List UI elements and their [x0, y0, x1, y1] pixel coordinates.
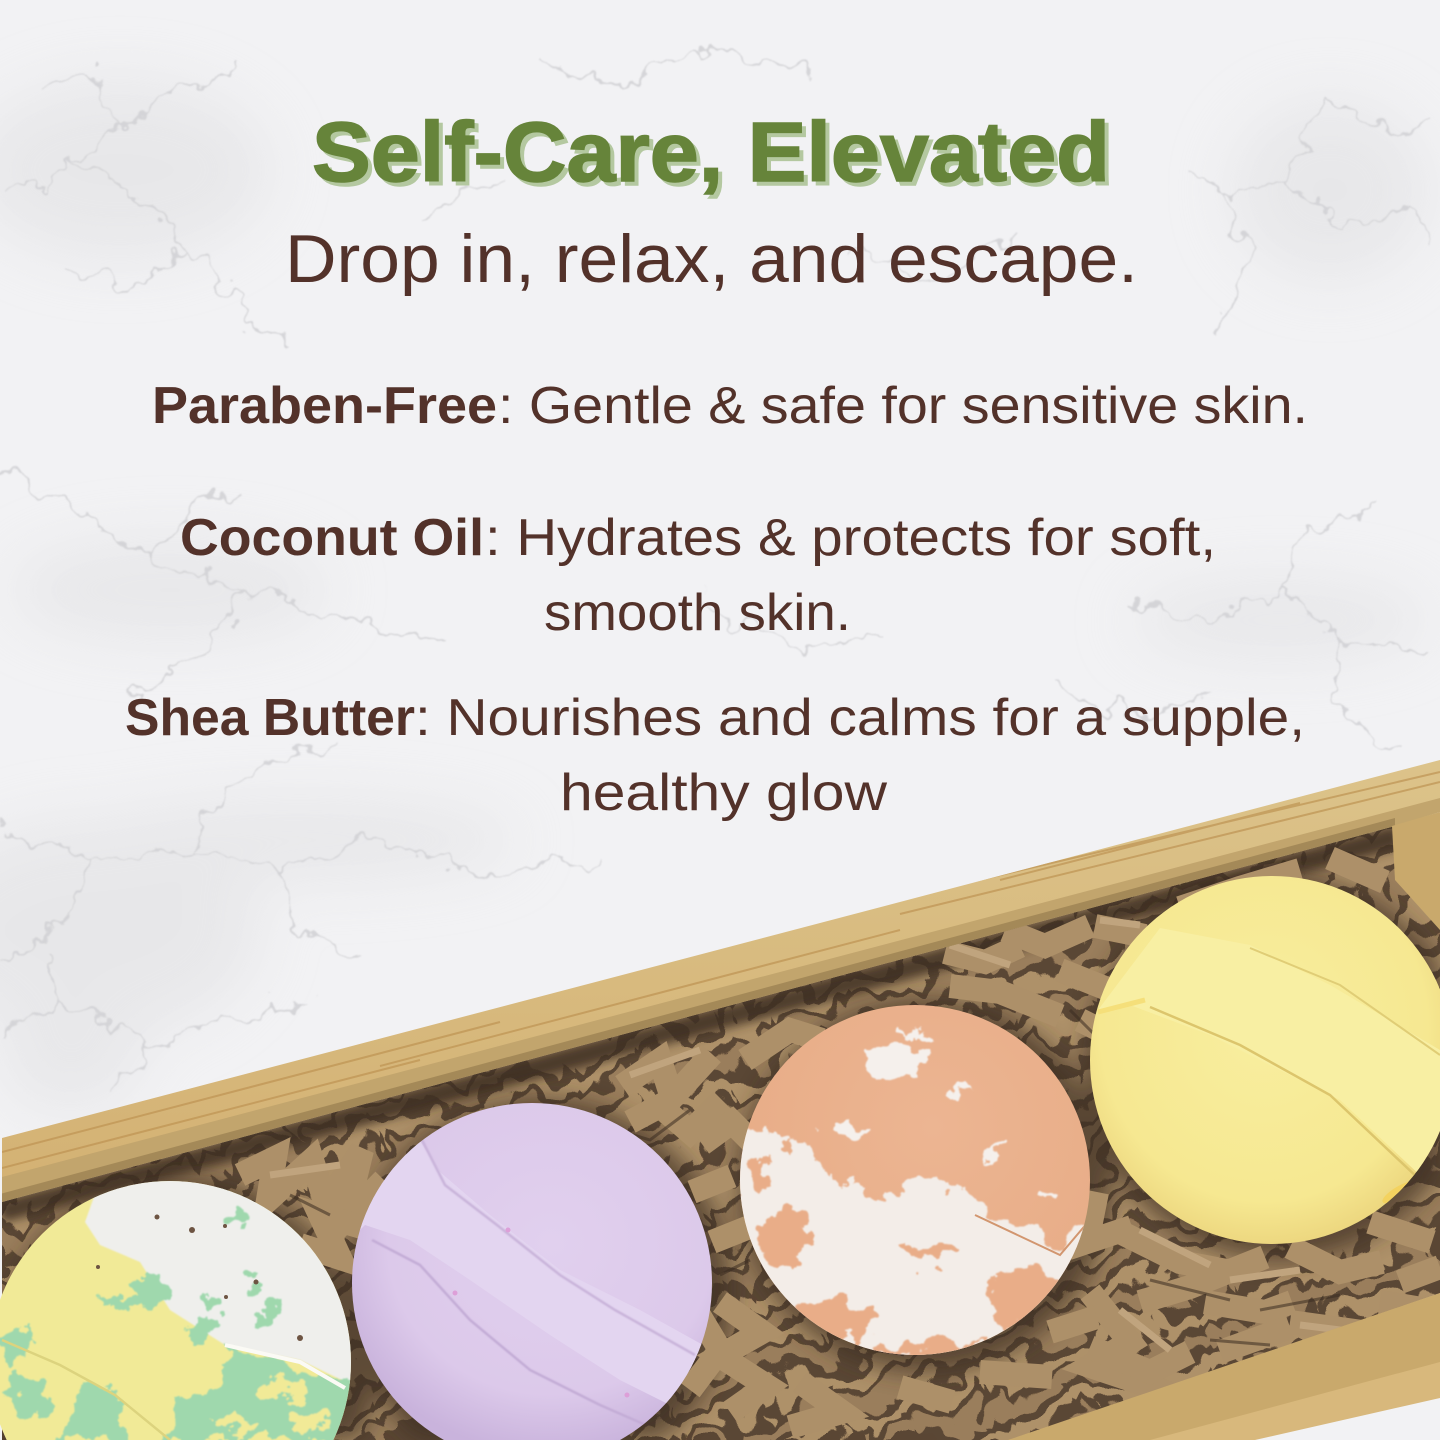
tray bottom rim — [1150, 1362, 1440, 1440]
inner wall top — [0, 790, 1440, 1202]
benefit: paraben-free: : Gentle & safe for sensitive skin. — [498, 377, 1308, 435]
benefit: coconut oil — [180, 509, 1216, 642]
benefit: coconut oil: smooth skin. — [544, 584, 851, 642]
bath bomb: orange — [735, 1003, 1095, 1360]
title: Self-Care, Elevated — [316, 109, 1114, 203]
shadows under rim and balls — [0, 836, 1400, 1212]
bath bomb: purple — [350, 1100, 715, 1440]
bath bomb: yellow — [1088, 874, 1440, 1244]
tray bottom wall — [1008, 1293, 1440, 1440]
benefit: coconut oil: : Hydrates & protects for soft, — [485, 509, 1216, 567]
benefit: shea butter: Shea Butter — [125, 689, 415, 747]
benefit: paraben-free: Paraben-Free — [152, 377, 497, 435]
tray right wall — [1392, 812, 1440, 930]
paper shreds — [0, 836, 1440, 1440]
benefit: shea butter — [125, 689, 1305, 822]
benefit: shea butter: healthy glow — [560, 764, 887, 822]
benefit: paraben-free — [152, 377, 1308, 435]
top rim — [2, 760, 1440, 1177]
subtitle: Drop in, relax, and escape. — [285, 221, 1138, 297]
wooden tray with paper shreds — [0, 760, 1440, 1440]
bath bomb: green and yellow — [0, 1180, 352, 1440]
tray floor with shred texture — [0, 815, 1440, 1440]
title: Self-Care, Elevated — [312, 105, 1110, 199]
benefit: shea butter: : Nourishes and calms for a supple, — [415, 689, 1305, 747]
benefit: coconut oil: Coconut Oil — [180, 509, 484, 567]
